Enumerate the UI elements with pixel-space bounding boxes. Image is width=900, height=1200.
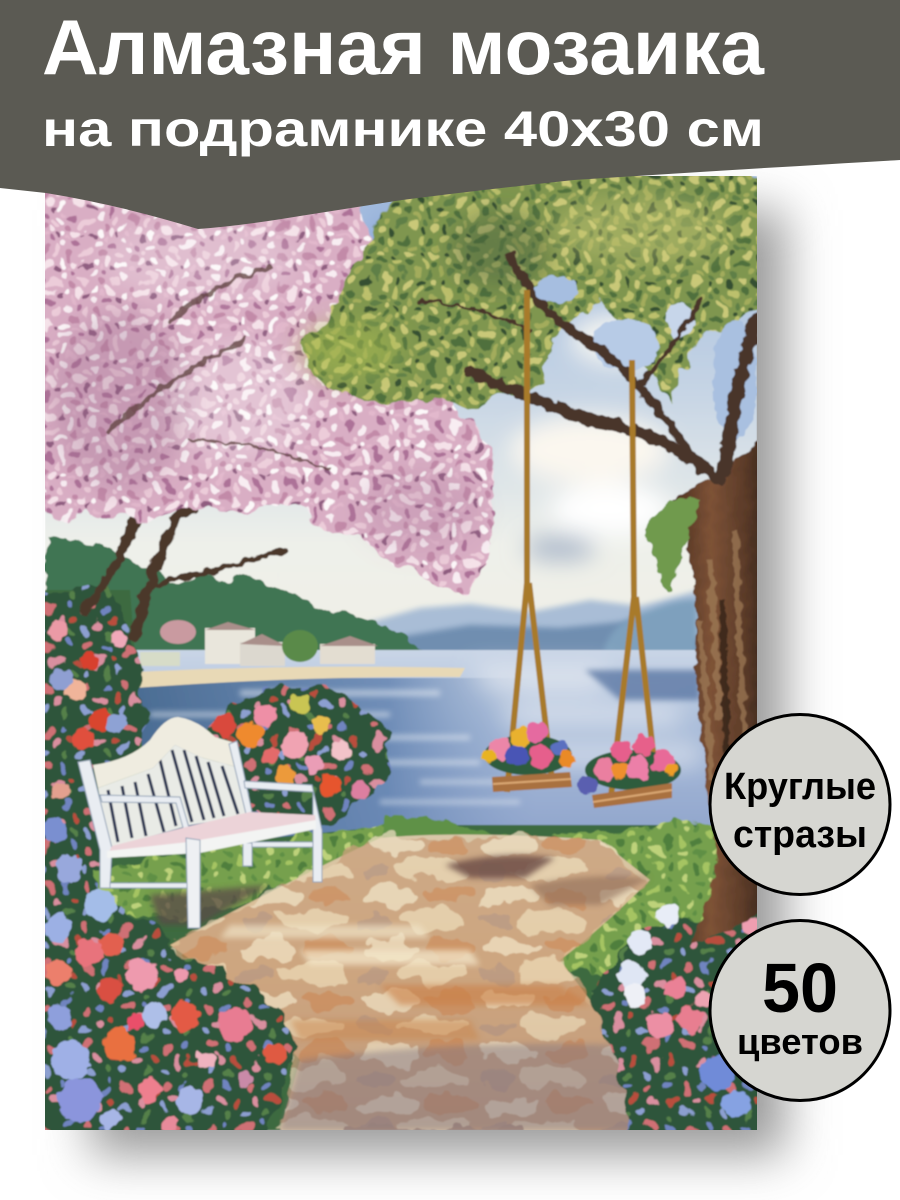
bottom left flowers — [45, 888, 298, 1130]
bench slats — [98, 745, 250, 848]
bench front leg — [186, 838, 200, 928]
green tree canopy — [300, 170, 770, 407]
badge: 50 colours: цветов — [737, 1021, 863, 1062]
left tree trunks — [79, 506, 290, 643]
grass shore strip — [380, 816, 520, 838]
path shadows — [150, 855, 650, 1130]
badge: 50 colours: 50 — [762, 949, 838, 1027]
badge: round rhinestones: стразы — [733, 814, 867, 856]
blossom tree branches — [110, 268, 330, 470]
distant mountains — [370, 588, 699, 650]
right tree trunk — [672, 440, 757, 944]
sky gaps in canopy — [533, 276, 757, 440]
left flower box — [482, 721, 575, 792]
hanging leaves by trunk — [645, 498, 700, 592]
pink blossom tree — [30, 180, 499, 590]
left garden shrubs — [45, 584, 151, 896]
bench posts and rails — [78, 741, 322, 888]
badge: round rhinestones — [710, 714, 890, 894]
bottom right flowers — [589, 902, 757, 1130]
sky — [45, 176, 757, 636]
badge: 50 colours — [710, 920, 890, 1100]
canopy tones — [300, 195, 730, 380]
stone path — [170, 834, 650, 1130]
foreground grass right — [552, 816, 719, 977]
painting on canvas — [30, 170, 770, 1140]
subtitle: на подрамнике 40х30 см — [42, 101, 764, 157]
swing ropes — [507, 290, 658, 805]
title: Алмазная мозаика — [42, 3, 765, 91]
bench crest — [93, 717, 240, 788]
canvas drop shadow — [90, 210, 785, 1155]
foreground grass left — [92, 823, 385, 923]
flowering bush behind bench — [203, 685, 387, 825]
village houses and shore — [135, 620, 465, 688]
right flower box — [578, 734, 681, 808]
header banner — [0, 0, 900, 229]
badge: round rhinestones: Круглые — [724, 766, 876, 808]
white bench — [78, 717, 322, 928]
lake — [136, 648, 711, 838]
green tree branches — [420, 255, 757, 480]
bench seat with petals — [107, 812, 316, 856]
clouds — [360, 210, 670, 560]
blossom tree tones — [50, 220, 480, 550]
far green hillside — [45, 536, 422, 651]
left flowers over shrubs — [43, 620, 129, 882]
ground base — [45, 590, 757, 1130]
